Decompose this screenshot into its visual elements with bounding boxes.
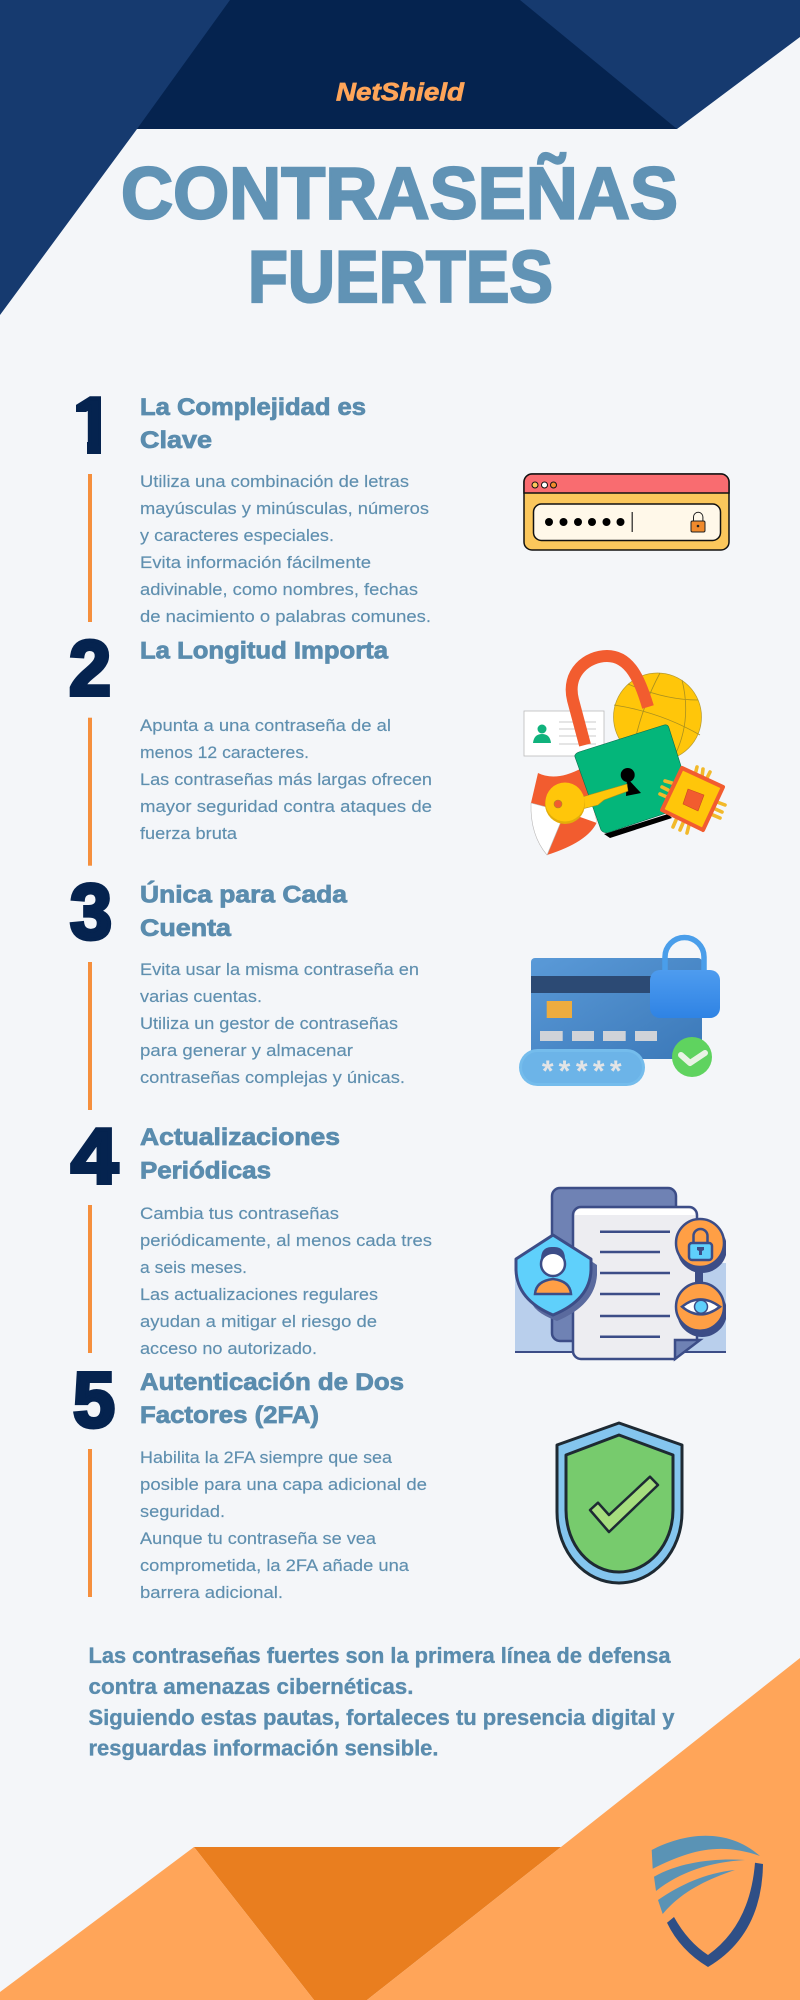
icon: credit card with lock: * — [576, 1055, 588, 1088]
panel: section 2 — [69, 624, 725, 866]
body text 5 — [140, 1448, 427, 1602]
orange bar 2 — [88, 718, 92, 866]
body text 4: a seis meses. — [140, 1258, 247, 1277]
body text 5: comprometida, la 2FA añade una — [140, 1556, 410, 1575]
body text 3: varias cuentas. — [140, 987, 262, 1006]
body text 2: mayor seguridad contra ataques de — [140, 797, 432, 816]
number 3: 3 — [70, 868, 112, 956]
body text 2: Las contraseñas más largas ofrecen — [140, 770, 432, 789]
body text 3: contraseñas complejas y únicas. — [140, 1068, 405, 1087]
panel: section 1 — [71, 381, 729, 626]
orange bar 1 — [88, 474, 92, 622]
body text 3: Utiliza un gestor de contraseñas — [140, 1014, 398, 1033]
number 4: 4 — [71, 1112, 118, 1200]
body text 1: Evita información fácilmente — [140, 553, 371, 572]
heading 5: Autenticación de Dos — [140, 1369, 404, 1396]
heading 5 — [140, 1369, 404, 1429]
icon: green check shield — [557, 1423, 682, 1583]
icon: credit card with lock: * — [610, 1055, 622, 1088]
body text 1: Utiliza una combinación de letras — [140, 472, 409, 491]
closing statement: Siguiendo estas pautas, fortaleces tu presencia digital y — [88, 1705, 675, 1730]
panel: section 5 — [73, 1356, 682, 1602]
heading 1: La Complejidad es — [140, 394, 366, 421]
heading 3: Cuenta — [140, 915, 231, 942]
body text 4 — [140, 1204, 432, 1358]
icon: credit card with lock: * — [593, 1055, 605, 1088]
closing statement — [88, 1643, 675, 1761]
icon: credit card with lock — [519, 938, 720, 1088]
header background shapes — [0, 0, 800, 315]
heading 3: Única para Cada — [140, 881, 347, 909]
body text 1 — [140, 472, 431, 626]
title: CONTRASEÑAS — [121, 154, 678, 234]
body text 2: Apunta a una contraseña de al — [140, 716, 391, 735]
footer background shapes — [0, 1658, 800, 2000]
number 5: 5 — [73, 1356, 115, 1444]
body text 4: periódicamente, al menos cada tres — [140, 1231, 432, 1250]
body text 1: mayúsculas y minúsculas, números — [140, 499, 429, 518]
title — [121, 154, 678, 318]
body text 5: Habilita la 2FA siempre que sea — [140, 1448, 393, 1467]
heading 5: Factores (2FA) — [140, 1402, 319, 1429]
body text 5: seguridad. — [140, 1502, 225, 1521]
body text 4: acceso no autorizado. — [140, 1339, 317, 1358]
icon: password window — [524, 474, 729, 550]
body text 5: posible para una capa adicional de — [140, 1475, 427, 1494]
heading 4: Periódicas — [140, 1158, 271, 1185]
body text 4: Las actualizaciones regulares — [140, 1285, 378, 1304]
heading 1: Clave — [140, 427, 212, 454]
orange bar 3 — [88, 962, 92, 1110]
body text 3 — [140, 960, 419, 1087]
panel: section 3 — [70, 868, 720, 1110]
body text 1: de nacimiento o palabras comunes. — [140, 607, 431, 626]
body text 3: para generar y almacenar — [140, 1041, 353, 1060]
body text 1: y caracteres especiales. — [140, 526, 334, 545]
number 1: 1 — [71, 381, 116, 469]
brand name: NetShield — [336, 78, 465, 106]
body text 2: fuerza bruta — [140, 824, 238, 843]
number 2: 2 — [69, 624, 111, 712]
heading 3 — [140, 881, 347, 942]
closing statement: contra amenazas cibernéticas. — [88, 1674, 414, 1699]
heading 4 — [140, 1124, 340, 1185]
body text 4: ayudan a mitigar el riesgo de — [140, 1312, 377, 1331]
body text 4: Cambia tus contraseñas — [140, 1204, 339, 1223]
body text 5: Aunque tu contraseña se vea — [140, 1529, 377, 1548]
icon: credit card with lock: * — [542, 1055, 554, 1088]
closing statement: Las contraseñas fuertes son la primera línea de defensa — [88, 1643, 671, 1668]
panel: section 4 — [71, 1112, 727, 1359]
body text 1: adivinable, como nombres, fechas — [140, 580, 418, 599]
body text 3: Evita usar la misma contraseña en — [140, 960, 419, 979]
orange bar 5 — [88, 1449, 92, 1597]
heading 2: La Longitud Importa — [140, 638, 388, 665]
icon: padlock, key, globe, chip — [524, 656, 725, 855]
orange bar 4 — [88, 1205, 92, 1353]
heading 1 — [140, 394, 366, 454]
body text 5: barrera adicional. — [140, 1583, 283, 1602]
title: FUERTES — [248, 237, 553, 318]
body text 2: menos 12 caracteres. — [140, 743, 309, 762]
heading 4: Actualizaciones — [140, 1124, 340, 1151]
icon: credit card with lock: * — [559, 1055, 571, 1088]
body text 2 — [140, 716, 432, 843]
icon: NetShield shield logo — [652, 1836, 763, 1967]
closing statement: resguardas información sensible. — [88, 1736, 438, 1761]
icon: document with shield — [515, 1188, 727, 1359]
